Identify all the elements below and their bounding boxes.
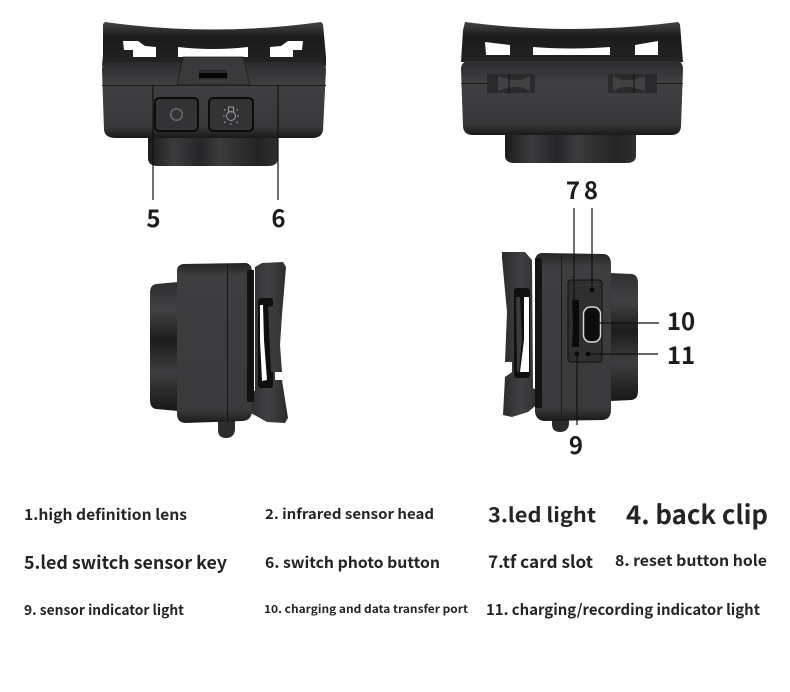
legend 10: 10. charging and data transfer port — [264, 601, 468, 617]
callout: 9: 9 — [569, 426, 583, 461]
legend 11: 11. charging/recording indicator light — [486, 599, 761, 620]
port panel — [568, 280, 602, 362]
reset hole — [590, 288, 594, 292]
bump: left side — [218, 420, 235, 438]
slide clip: right — [608, 74, 657, 93]
legend 6: 6. switch photo button — [265, 551, 440, 573]
legend 8: 8. reset button hole — [615, 550, 767, 571]
device: rear view — [461, 22, 683, 163]
callout: 5: 5 — [146, 199, 161, 234]
lens: front view — [148, 136, 278, 166]
device: left side view — [150, 262, 288, 438]
lens: left side — [150, 282, 178, 411]
legend 9: 9. sensor indicator light — [24, 600, 184, 620]
bump: right side — [552, 416, 569, 432]
back clip: front view — [102, 22, 326, 66]
callout: 10: 10 — [667, 302, 695, 337]
callout: 7 — [566, 171, 580, 302]
back clip: left side — [247, 262, 288, 423]
legend 4: 4. back clip — [626, 495, 768, 532]
legend 7: 7.tf card slot — [488, 548, 593, 573]
callout: 11: 11 — [667, 336, 695, 371]
device: right side view with ports — [502, 252, 638, 432]
lens: right side — [610, 273, 638, 401]
legend 2: 2. infrared sensor head — [265, 504, 434, 524]
usb-c port — [584, 307, 600, 342]
legend 5: 5.led switch sensor key — [24, 549, 228, 575]
button: light switch — [209, 98, 253, 131]
tf card slot — [572, 300, 579, 347]
button: sensor key — [155, 98, 198, 131]
device: front view with buttons — [102, 22, 326, 166]
lens: rear view — [505, 134, 636, 163]
back clip: rear view — [461, 22, 683, 62]
body: right side — [535, 253, 611, 421]
body: left side — [177, 263, 252, 423]
callout: 6: 6 — [271, 199, 286, 234]
legend 3: 3.led light — [488, 499, 597, 528]
callout: 9 — [569, 354, 583, 461]
callout: 7: 7 — [566, 171, 580, 206]
legend text — [24, 495, 768, 620]
center tab with vent — [177, 57, 250, 85]
slide clip: left — [487, 74, 535, 93]
body: front view — [102, 62, 326, 138]
callout: 10 — [592, 302, 695, 337]
indicator lights — [575, 352, 590, 356]
body: rear view — [461, 61, 683, 135]
callout: 11 — [588, 336, 695, 371]
back clip: right side — [502, 252, 540, 417]
legend 1: 1.high definition lens — [24, 504, 187, 525]
callout: 8 — [584, 171, 598, 290]
callout: 8: 8 — [584, 171, 598, 206]
